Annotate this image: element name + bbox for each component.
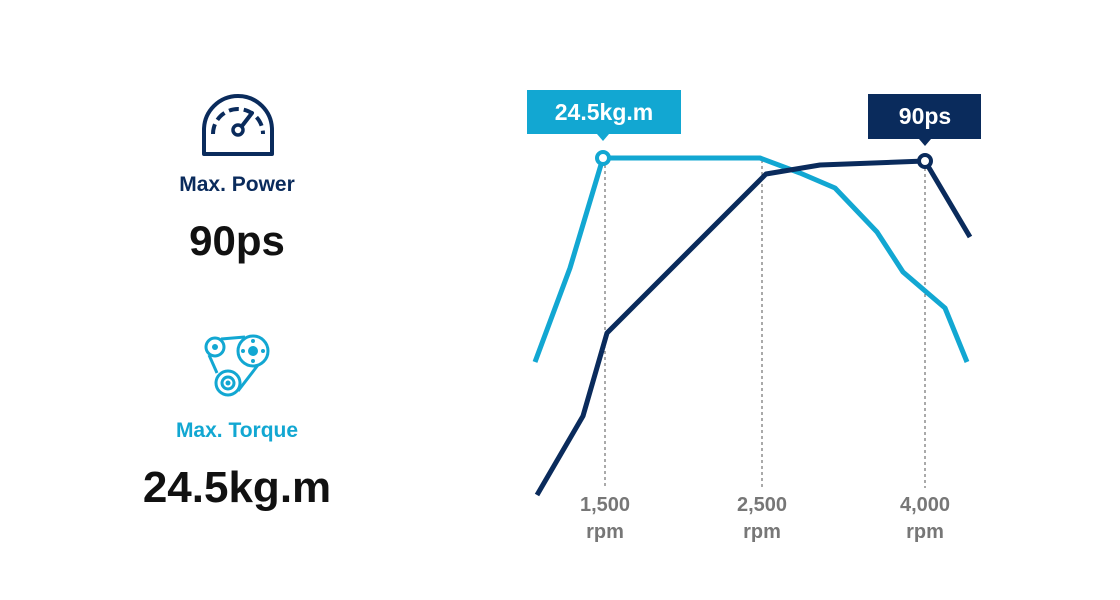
axis labels: 4,000 — [900, 494, 950, 516]
icon: belt pulleys — [204, 334, 270, 396]
icon: speedometer — [202, 94, 274, 156]
callout: power: 90ps — [899, 103, 951, 129]
heading: max torque: Max. Torque — [176, 419, 298, 442]
axis labels: 2,500 — [737, 494, 787, 516]
heading: max power: Max. Power — [179, 173, 295, 196]
callout: torque — [527, 90, 681, 141]
axis labels: rpm — [586, 521, 624, 543]
callout: power — [868, 94, 981, 146]
axis labels: rpm — [743, 521, 781, 543]
callout: torque: 24.5kg.m — [555, 99, 653, 125]
axis labels — [580, 494, 950, 543]
axis labels: 1,500 — [580, 494, 630, 516]
axis labels: rpm — [906, 521, 944, 543]
value: 90ps: 90ps — [189, 217, 285, 264]
power line — [537, 161, 970, 495]
value: 24.5kg.m: 24.5kg.m — [143, 463, 331, 512]
torque line — [535, 158, 967, 362]
